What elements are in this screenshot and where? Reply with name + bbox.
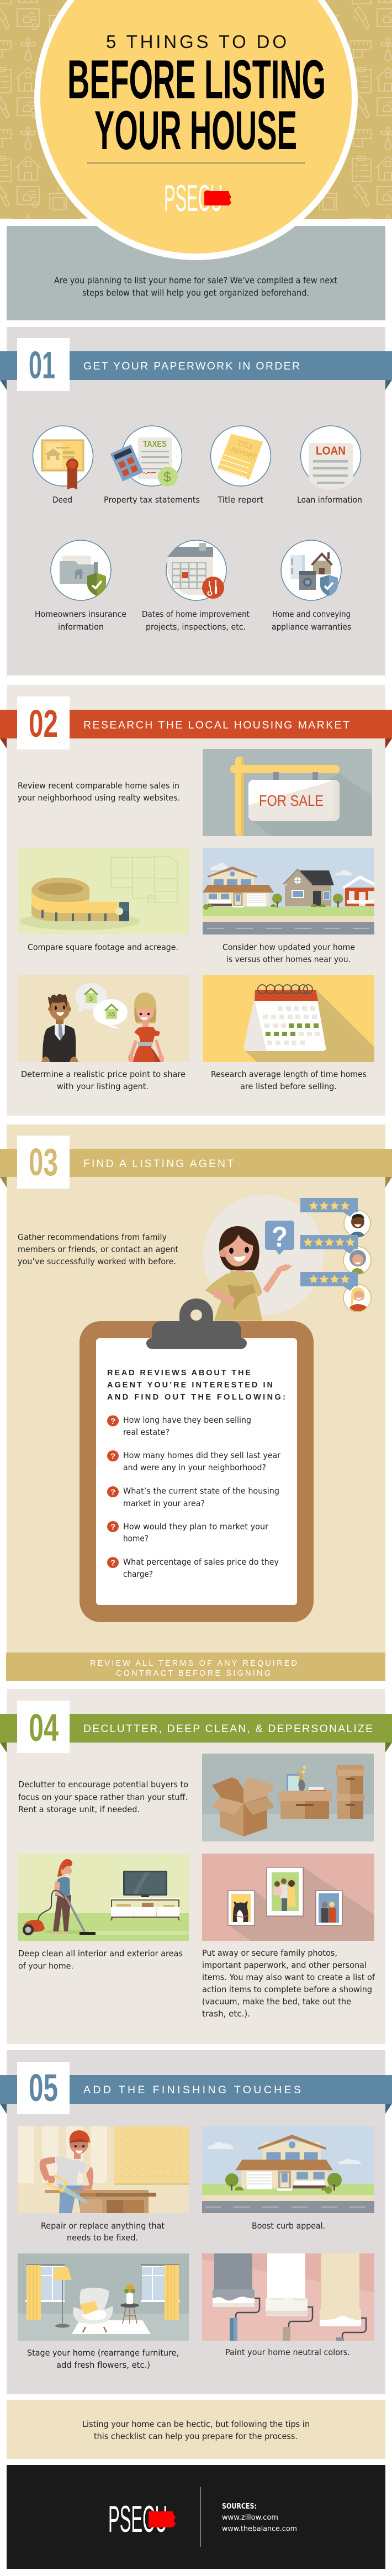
callout band: contract: CONTRACT BEFORE SIGNING (116, 1669, 271, 1678)
panel: closing note: this checklist can help you prepare for the process. (94, 2431, 298, 2441)
illustration: staging (18, 2253, 189, 2341)
clipboard heading: AGENT YOU’RE INTERESTED IN (107, 1381, 273, 1390)
review one (300, 1198, 370, 1238)
intro text: steps below that will help you get organized beforehand. (82, 287, 309, 298)
panel: section 5 (7, 2050, 385, 2394)
question two: ? (110, 1451, 115, 1461)
panel: section 1 (7, 327, 385, 675)
footer logo (108, 2498, 176, 2540)
roller beige (320, 2253, 366, 2341)
question four: How would they plan to market your (123, 1522, 269, 1532)
icon: loan (300, 426, 361, 490)
question three: What’s the current state of the housing (123, 1486, 279, 1496)
clipboard heading (107, 1369, 285, 1402)
icon: taxes (110, 426, 182, 487)
question three: market in your area? (123, 1498, 205, 1508)
number 05: 05 (29, 2066, 58, 2109)
bubble two (93, 999, 128, 1028)
label: warranties: Home and conveying (272, 609, 351, 619)
text: declutter (18, 1780, 188, 1814)
caption: photos: trash, etc.). (202, 2009, 250, 2019)
heading 05: ADD THE FINISHING TOUCHES (83, 2084, 301, 2096)
icon: calendar (166, 540, 226, 600)
label: dates: Dates of home improvement (142, 609, 250, 619)
question five: What percentage of sales price do they (123, 1557, 279, 1567)
illustration: tape measure (18, 848, 189, 935)
illustration: repair (18, 2126, 189, 2213)
question five (107, 1557, 279, 1579)
heading 02: RESEARCH THE LOCAL HOUSING MARKET (83, 719, 349, 731)
text: declutter: focus on your space rather than your stuff. (18, 1792, 188, 1802)
label: taxes: Property tax statements (104, 495, 200, 505)
open box (211, 1777, 274, 1836)
panel: intro (7, 226, 385, 320)
caption: repair: Repair or replace anything that (41, 2221, 165, 2231)
woman (128, 993, 164, 1062)
question two (107, 1450, 281, 1472)
caption: time listed: are listed before selling. (240, 1081, 337, 1091)
icon: taxes: $ (163, 469, 171, 485)
panel: footer (7, 2465, 385, 2569)
label: dates (142, 609, 250, 632)
saw (47, 2176, 88, 2204)
question one (107, 1415, 251, 1437)
worker (40, 2130, 93, 2213)
question three: ? (110, 1488, 115, 1497)
label: warranties: appliance warranties (272, 622, 351, 632)
number 03: 03 (29, 1141, 58, 1184)
logo: PSECU (164, 177, 231, 219)
question four (107, 1521, 269, 1543)
caption: photos: important paperwork, and other personal (202, 1960, 367, 1970)
text: gather recommendations: Gather recommendations from family (18, 1232, 167, 1242)
caption: deep clean: Deep clean all interior and exterior areas (18, 1949, 183, 1959)
question one: How long have they been selling (123, 1415, 251, 1425)
curtains (27, 2265, 179, 2320)
clipboard (80, 1298, 314, 1622)
text: declutter: Declutter to encourage potential buyers to (18, 1780, 188, 1790)
sources: SOURCES: (222, 2502, 257, 2511)
label: insurance: information (58, 622, 104, 632)
question four: ? (110, 1522, 115, 1532)
roller grey (213, 2253, 259, 2341)
banner: section 2 (0, 696, 392, 749)
intro text: Are you planning to list your home for sale? We’ve compiled a few next (54, 275, 337, 286)
roller white (266, 2253, 312, 2341)
heading 01: GET YOUR PAPERWORK IN ORDER (83, 360, 300, 372)
banner: section 1 (0, 338, 392, 391)
icon: loan: LOAN (316, 445, 346, 457)
header: patterned background (0, 0, 392, 219)
question two: How many homes did they sell last year (123, 1450, 281, 1460)
banner: section 3 (0, 1136, 392, 1189)
caption: curb appeal: Boost curb appeal. (252, 2221, 325, 2231)
label: deed: Deed (52, 495, 72, 505)
panel: section 2 (7, 685, 385, 1116)
man (41, 994, 78, 1062)
logo: PSECU: PSECU (164, 177, 223, 219)
illustration: curb appeal (202, 2126, 374, 2213)
review two (300, 1235, 371, 1274)
title line 1: 5 THINGS TO DO (106, 31, 287, 52)
callout band: contract: REVIEW ALL TERMS OF ANY REQUIRED (90, 1659, 297, 1668)
banner: section 5 (0, 2062, 392, 2114)
workbench (45, 2190, 156, 2213)
panel: section 4 (7, 1689, 385, 2044)
question one: real estate? (123, 1427, 169, 1437)
bubble one: $ (89, 994, 93, 1002)
house two (283, 869, 334, 906)
illustration: neighborhood houses (203, 848, 374, 935)
question bubble (265, 1221, 294, 1255)
text: declutter: Rent a storage unit, if needed. (18, 1804, 140, 1814)
clipboard heading: AND FIND OUT THE FOLLOWING: (107, 1393, 285, 1402)
number 04: 04 (29, 1706, 59, 1749)
sign text: FOR SALE (259, 792, 324, 809)
caption: staging (27, 2348, 179, 2370)
floor lamp (52, 2267, 72, 2327)
panel: section 3 (7, 1125, 385, 1653)
illustration: family photos (202, 1854, 374, 1941)
text: gather recommendations: you’ve successfully worked with before. (18, 1257, 176, 1266)
illustration: agent and reviews (203, 1195, 371, 1321)
frame: family (267, 1867, 303, 1916)
caption: price point (21, 1069, 186, 1091)
panel: closing note (7, 2400, 385, 2459)
person vacuuming (23, 1859, 96, 1935)
rug (72, 2320, 151, 2334)
caption: price point: with your listing agent. (57, 1081, 149, 1091)
caption: deep clean: of your home. (18, 1961, 73, 1971)
heading 04: DECLUTTER, DEEP CLEAN, & DEPERSONALIZE (83, 1723, 373, 1735)
caption: price point: Determine a realistic price point to share (21, 1069, 186, 1079)
caption: repair (41, 2221, 165, 2242)
question bubble: ? (272, 1221, 288, 1253)
house one (203, 867, 274, 910)
sources (222, 2502, 297, 2533)
house three (342, 875, 374, 906)
caption: updated: Consider how updated your home (223, 942, 355, 952)
number 01: 01 (29, 344, 55, 387)
illustration: price discussion (18, 975, 189, 1062)
icon: warranties (281, 540, 341, 600)
caption: staging: add fresh flowers, etc.) (56, 2360, 150, 2370)
bubble one (75, 983, 107, 1012)
low box with decor (278, 1766, 332, 1819)
illustration: boxes (202, 1754, 374, 1841)
caption: time listed: Research average length of time homes (211, 1069, 367, 1079)
armchair (73, 2288, 113, 2332)
title circle (34, 0, 358, 260)
caption: photos (202, 1948, 375, 2019)
illustration: vacuuming (18, 1854, 189, 1941)
frame: friends (316, 1891, 342, 1925)
frame: dog (228, 1891, 255, 1925)
icon: deed (33, 426, 93, 489)
callout band: contract (6, 1653, 385, 1681)
banner: section 4 (0, 1701, 392, 1753)
question three (107, 1486, 279, 1508)
label: insurance (35, 609, 126, 632)
clipboard clip (146, 1298, 247, 1349)
sources: www.zillow.com (222, 2513, 278, 2522)
panel: closing note: Listing your home can be hectic, but following the tips in (82, 2419, 310, 2429)
sources: www.thebalance.com (222, 2524, 297, 2533)
caption: time listed (211, 1069, 367, 1091)
footer logo: PSECU (108, 2498, 167, 2540)
illustration: calendar (203, 975, 374, 1062)
icon: taxes: TAXES (143, 440, 167, 449)
icon: insurance (51, 540, 111, 600)
question two: and were any in your neighborhood? (123, 1463, 266, 1472)
caption: photos: Put away or secure family photos, (202, 1948, 337, 1958)
intro text (54, 275, 337, 298)
caption: updated: is versus other homes near you. (226, 954, 351, 964)
question four: home? (123, 1533, 149, 1543)
illustration: for sale sign (203, 749, 372, 836)
label: insurance: Homeowners insurance (35, 609, 126, 619)
agent woman (205, 1226, 293, 1321)
question five: charge? (123, 1569, 153, 1579)
windows (25, 2264, 180, 2302)
icon: title report: REPORT (230, 445, 257, 461)
label: loan: Loan information (297, 495, 362, 505)
question five: ? (110, 1559, 115, 1567)
stacked boxes (336, 1765, 364, 1819)
caption: photos: action items to complete before a showing (202, 1984, 372, 1994)
heading 03: FIND A LISTING AGENT (83, 1158, 234, 1170)
text: review sales (18, 781, 180, 803)
caption: updated (223, 942, 355, 964)
caption: photos: (vacuum, make the bed, take out the (202, 1997, 351, 2007)
review three (300, 1272, 371, 1312)
text: review sales: your neighborhood using realty websites. (18, 793, 180, 803)
icon: title report (211, 426, 271, 486)
tv unit (110, 1871, 180, 1920)
caption: square footage: Compare square footage and acreage. (28, 942, 178, 952)
caption: repair: needs to be fixed. (67, 2232, 138, 2242)
side table (120, 2284, 139, 2324)
text: gather recommendations (18, 1232, 178, 1266)
clipboard heading: READ REVIEWS ABOUT THE (107, 1369, 251, 1377)
label: dates: projects, inspections, etc. (146, 622, 246, 632)
bubble two: $$ (108, 1011, 115, 1018)
text: gather recommendations: members or friends, or contact an agent (18, 1244, 178, 1254)
caption: photos: items. You may also want to create a list of (202, 1972, 375, 1982)
number 02: 02 (29, 702, 58, 745)
caption: deep clean (18, 1949, 183, 1971)
illustration: paint rollers (202, 2253, 374, 2341)
icon: title report: TITLE (237, 439, 255, 451)
label: warranties (272, 609, 351, 632)
question one: ? (110, 1417, 115, 1426)
caption: staging: Stage your home (rearrange furniture, (27, 2348, 179, 2358)
caption: paint: Paint your home neutral colors. (225, 2347, 350, 2357)
text: review sales: Review recent comparable home sales in (18, 781, 179, 791)
label: title report: Title report (217, 495, 263, 505)
